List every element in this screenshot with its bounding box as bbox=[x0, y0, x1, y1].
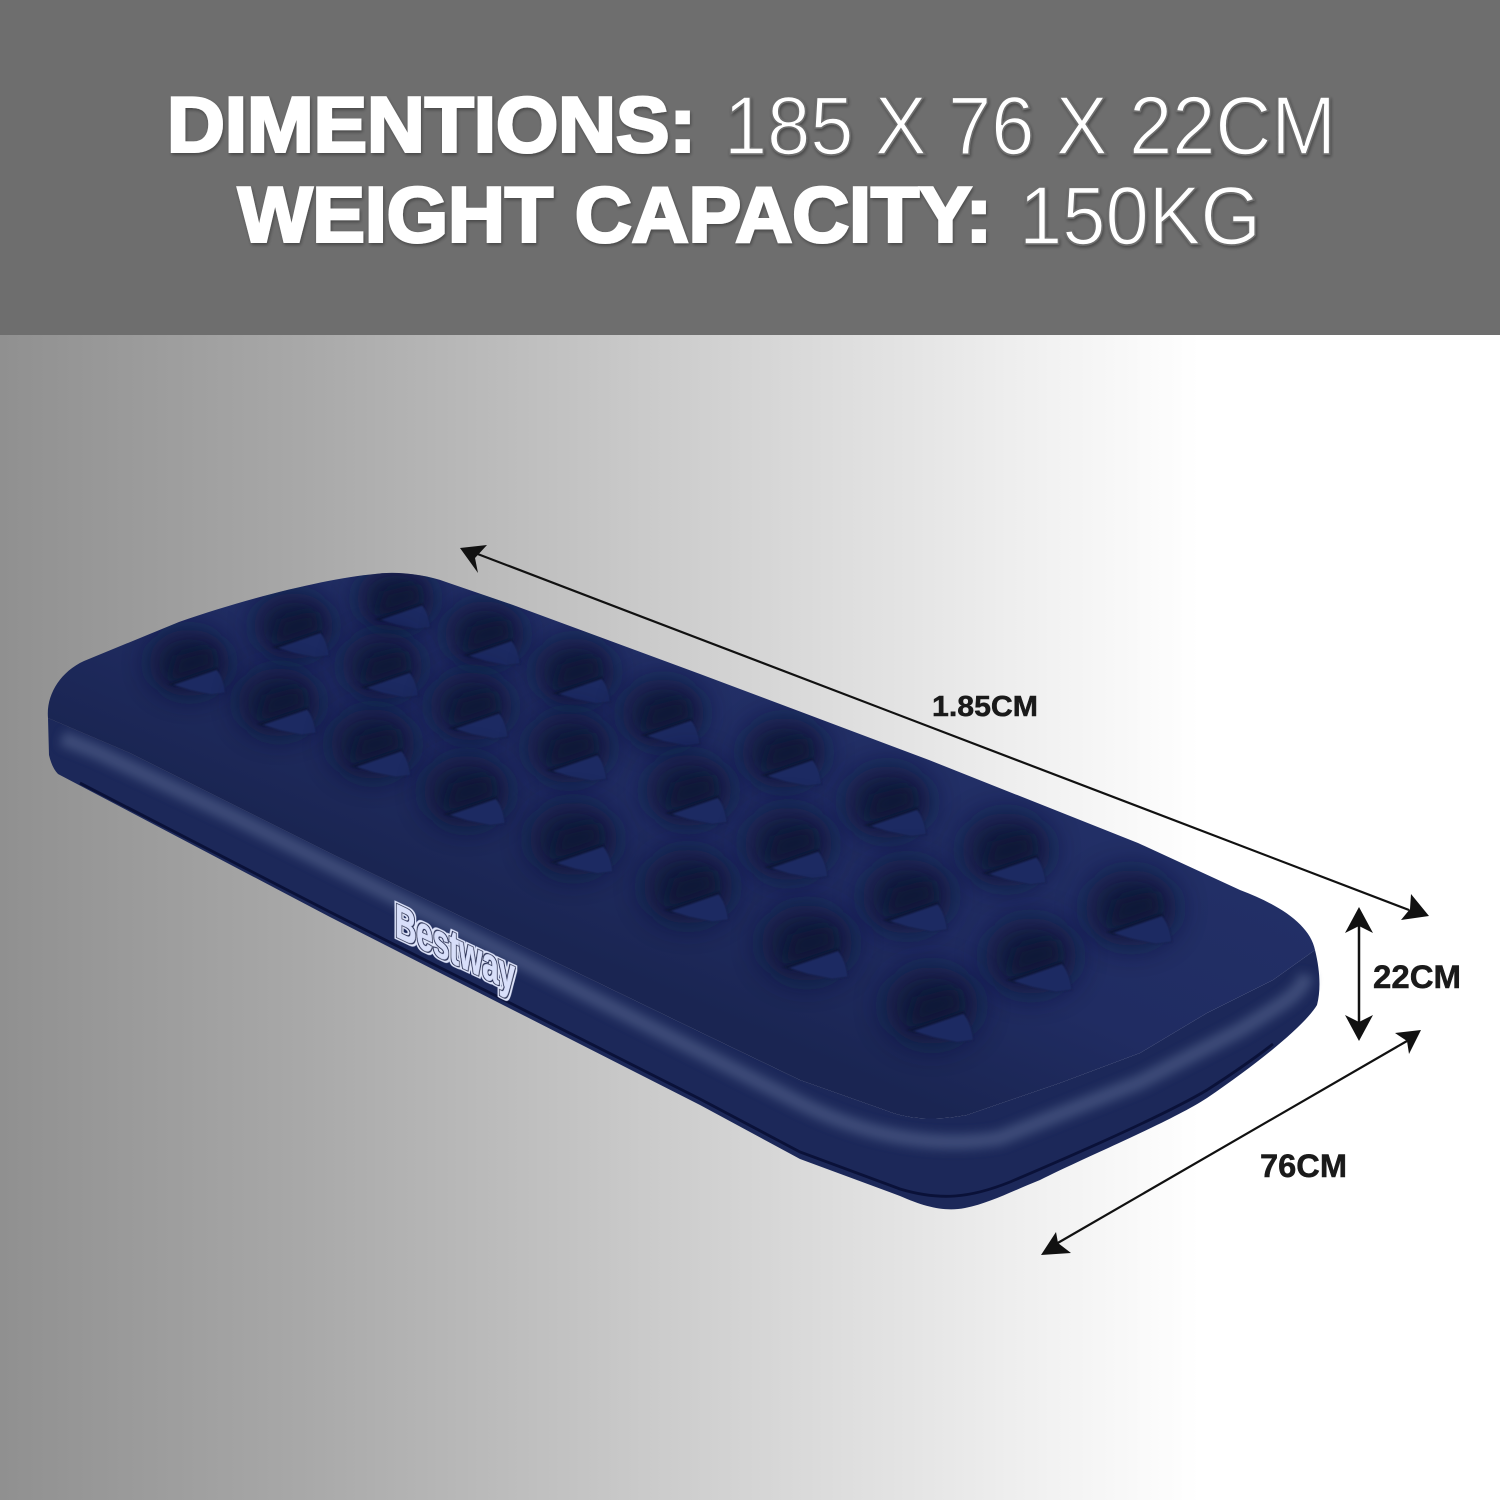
title: weight capacity line: WEIGHT CAPACITY: bbox=[238, 170, 992, 258]
label: height: 22CM bbox=[1373, 959, 1461, 995]
title: dimensions line bbox=[167, 79, 1336, 172]
side wall highlight bbox=[62, 738, 1307, 1142]
background gradient panel bbox=[0, 335, 1500, 1500]
arrow: width bbox=[1041, 1030, 1421, 1255]
arrow: height bbox=[1345, 907, 1373, 1041]
title: weight capacity line bbox=[238, 169, 1261, 262]
tufted dimples bbox=[149, 566, 1177, 1044]
title: weight capacity line: 150KG bbox=[1019, 169, 1261, 262]
header banner bbox=[0, 0, 1500, 335]
label: width: 76CM bbox=[1260, 1148, 1347, 1184]
bottom seam line bbox=[80, 783, 1273, 1196]
title: dimensions line: DIMENTIONS: bbox=[167, 80, 696, 168]
mattress side wall bbox=[48, 718, 1319, 1209]
title: dimensions line: 185 X 76 X 22CM bbox=[724, 79, 1336, 172]
air mattress product bbox=[48, 566, 1319, 1209]
label: length: 1.85CM bbox=[932, 691, 1038, 723]
Bestway logo: Bestway bbox=[395, 894, 515, 1002]
mattress top surface bbox=[48, 573, 1315, 1119]
arrow: length bbox=[460, 545, 1429, 920]
